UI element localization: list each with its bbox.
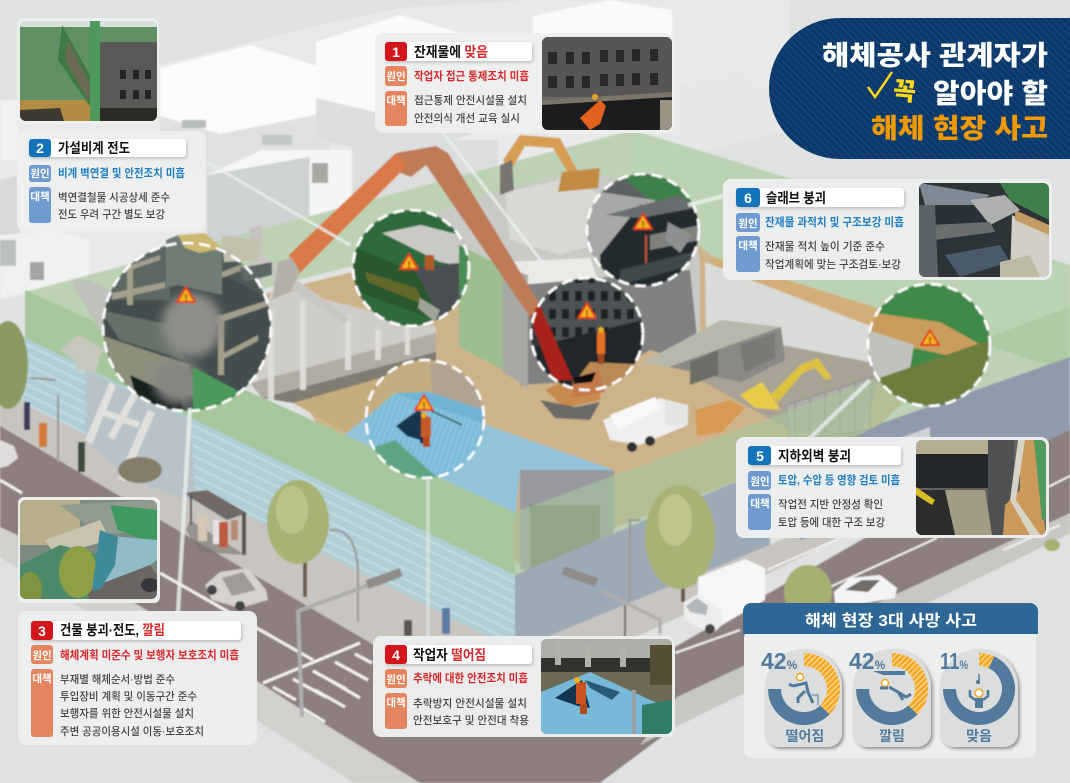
cause: 원인 <box>750 475 770 488</box>
dashed circle markers <box>103 174 990 478</box>
cause <box>385 669 528 688</box>
countermeasure: 대책 <box>738 239 758 252</box>
yellow excavator <box>740 358 832 410</box>
cause <box>748 471 900 490</box>
front fence, right side: green panels <box>515 307 1070 575</box>
title banner <box>769 18 1070 159</box>
hazard circle 5: basement wall collapse <box>868 284 995 410</box>
heading <box>31 621 241 640</box>
white box truck <box>684 559 765 634</box>
heading: 5 <box>756 448 764 464</box>
hazard circle 1: debris strike <box>530 277 642 398</box>
heading: 4 <box>392 647 400 663</box>
cause: 원인 <box>30 167 50 180</box>
stat: crushed 42% <box>849 648 931 747</box>
front fence, left side: blue lower panels <box>23 337 515 650</box>
cause <box>29 165 185 182</box>
heading: 슬래브 붕괴 <box>766 190 826 206</box>
panel: 5 basement wall collapse <box>736 437 1049 538</box>
panel: three major fatal accidents <box>743 603 1038 758</box>
title line 2: 알아야 할 <box>933 79 1048 109</box>
heading: 3 <box>38 623 46 639</box>
photo card: scaffold collapse <box>17 18 159 124</box>
warning triangles: ! <box>184 293 188 304</box>
pedestrians and worker on the pavement <box>24 402 450 636</box>
cause <box>31 645 239 664</box>
warning triangles: ! <box>407 260 411 271</box>
stat: crushed 42%: 42% <box>849 648 886 674</box>
hazard circle 6: slab collapse <box>587 174 700 290</box>
cause: 잔재물 과적치 및 구조보강 미흡 <box>765 215 904 229</box>
cause: 작업자 접근 통제조치 미흡 <box>414 69 529 83</box>
leader lines from cards to circles <box>178 133 870 637</box>
heading: 1 <box>392 44 400 60</box>
icon: struck worker <box>970 674 988 708</box>
heading: 지하외벽 붕괴 <box>778 448 851 464</box>
panel: 3 building collapse and crushing <box>18 611 257 745</box>
title line 1: 해체공사 관계자가 <box>822 41 1048 71</box>
countermeasure: 전도 우려 구간 별도 보강 <box>58 208 165 221</box>
collapsed fence and scaffold debris <box>60 280 197 503</box>
orange demolition excavator at top <box>500 135 600 195</box>
countermeasure: 대책 <box>30 190 50 203</box>
central demolished building <box>382 170 700 388</box>
warning triangles: ! <box>928 336 932 347</box>
cause: 토압, 수압 등 영향 검토 미흡 <box>778 473 900 487</box>
heading <box>385 645 532 664</box>
cause: 원인 <box>386 70 406 83</box>
countermeasure <box>29 187 170 223</box>
front fence, left side: green upper panels <box>25 290 515 575</box>
road <box>0 420 1070 783</box>
photo: worker under wall <box>542 37 672 130</box>
street lamps and traffic poles <box>30 378 660 717</box>
left concrete frame structure <box>250 225 460 440</box>
panel header: 해체 현장 3대 사망 사고 <box>805 612 977 630</box>
hazard circle 4: worker fall on roof <box>366 360 485 478</box>
countermeasure: 대책 <box>386 696 406 709</box>
photo card: building collapse <box>18 497 160 608</box>
blue roof building <box>336 393 614 570</box>
cause: 원인 <box>738 217 758 230</box>
heading: 6 <box>744 190 752 206</box>
heading <box>736 188 904 207</box>
water truck <box>603 397 745 452</box>
countermeasure <box>31 669 204 738</box>
stat: struck 11% <box>940 648 1018 747</box>
heading <box>748 446 901 465</box>
white car at left <box>0 440 18 468</box>
countermeasure: 투입장비 계획 및 이동구간 준수 <box>60 689 197 703</box>
stat: crushed 42%: 깔림 <box>879 728 905 744</box>
sidewalks <box>0 387 1070 783</box>
countermeasure: 대책 <box>32 672 52 685</box>
warning triangles: ! <box>641 220 645 231</box>
countermeasure: 주변 공공이용시설 이동·보호조치 <box>60 725 204 738</box>
countermeasure: 대책 <box>750 497 770 510</box>
bus stop with people <box>183 490 247 555</box>
warning triangles <box>177 214 939 412</box>
countermeasure: 보행자를 위한 안전시설물 설치 <box>60 707 194 720</box>
rubber-tracked excavator body <box>540 378 602 420</box>
panel: 2 scaffold collapse <box>17 131 206 231</box>
photo: collapsed slab <box>919 183 1049 277</box>
cause: 해체계획 미준수 및 보행자 보호조치 미흡 <box>60 648 239 662</box>
heading <box>385 42 532 61</box>
cause: 비계 벽연결 및 안전조치 미흡 <box>58 166 185 180</box>
back fences <box>25 128 1070 372</box>
countermeasure: 안전보호구 및 안전대 착용 <box>413 713 529 727</box>
countermeasure <box>385 91 527 126</box>
heading: 건물 붕괴·전도, 깔림 <box>60 622 165 638</box>
surrounding white buildings <box>0 0 790 300</box>
countermeasure: 추락방지 안전시설물 설치 <box>413 697 527 710</box>
icon: falling worker <box>789 674 818 705</box>
countermeasure <box>748 494 885 530</box>
stat: fall 42%: 42% <box>761 648 798 674</box>
title emphasis word: 꼭 <box>892 77 917 107</box>
panel: 6 slab collapse <box>723 179 1052 280</box>
countermeasure: 작업전 지반 안정성 확인 <box>778 498 883 511</box>
countermeasure: 토압 등에 대한 구조 보강 <box>778 515 885 529</box>
cause: 원인 <box>386 673 406 686</box>
cause <box>736 213 904 232</box>
countermeasure: 대책 <box>386 94 406 107</box>
cause <box>385 66 529 86</box>
front fence, right side: grey panels <box>515 470 770 650</box>
hazard circle 2: scaffold collapse <box>352 209 469 326</box>
stat: fall 42%: 떨어짐 <box>786 728 824 744</box>
heading: 작업자 떨어짐 <box>413 647 486 663</box>
icon: crushed worker <box>873 671 911 700</box>
countermeasure: 작업계획에 맞는 구조검토·보강 <box>765 257 901 271</box>
parked grey car <box>205 568 268 611</box>
countermeasure: 벽연결철물 시공상세 준수 <box>58 191 170 204</box>
countermeasure: 잔재물 적치 높이 기준 준수 <box>765 240 885 253</box>
stat: struck 11%: 11% <box>940 648 968 674</box>
neighbouring grey building <box>790 357 1070 540</box>
retaining wall platform <box>641 320 785 385</box>
excavator boom upper section highlight <box>289 153 408 277</box>
heading: 잔재물에 맞음 <box>414 44 488 60</box>
site ground <box>240 200 990 565</box>
photo: basement wall <box>916 440 1046 535</box>
stat: fall 42% <box>761 648 842 747</box>
cause: 원인 <box>32 649 52 662</box>
icon: check mark <box>868 72 892 97</box>
panel header <box>743 603 1038 634</box>
road markings <box>0 476 1070 722</box>
panel: 4 worker fall <box>373 636 675 737</box>
countermeasure: 안전의식 개선 교육 실시 <box>414 111 520 125</box>
heading: 2 <box>36 140 44 156</box>
heading <box>29 139 186 157</box>
crusher attachment <box>272 258 300 300</box>
excavator boom arm <box>289 146 539 317</box>
countermeasure: 부재별 해체순서·방법 준수 <box>60 673 175 686</box>
panel: 1 debris strike <box>375 33 675 133</box>
warning triangles: ! <box>422 401 426 412</box>
countermeasure <box>385 693 529 729</box>
warning triangles: ! <box>585 309 589 320</box>
hazard circle 3: collapsed building <box>100 233 272 420</box>
street trees <box>0 321 1060 619</box>
title line 3: 해체 현장 사고 <box>871 114 1048 144</box>
heading: 가설비계 전도 <box>58 140 130 156</box>
photo: worker on roof <box>541 639 672 734</box>
countermeasure <box>736 236 901 272</box>
site gate <box>786 378 870 440</box>
cause: 추락에 대한 안전조치 미흡 <box>413 671 528 685</box>
stat: struck 11%: 맞음 <box>966 728 992 744</box>
white car on road <box>834 575 897 604</box>
countermeasure: 접근통제 안전시설물 설치 <box>414 94 527 107</box>
